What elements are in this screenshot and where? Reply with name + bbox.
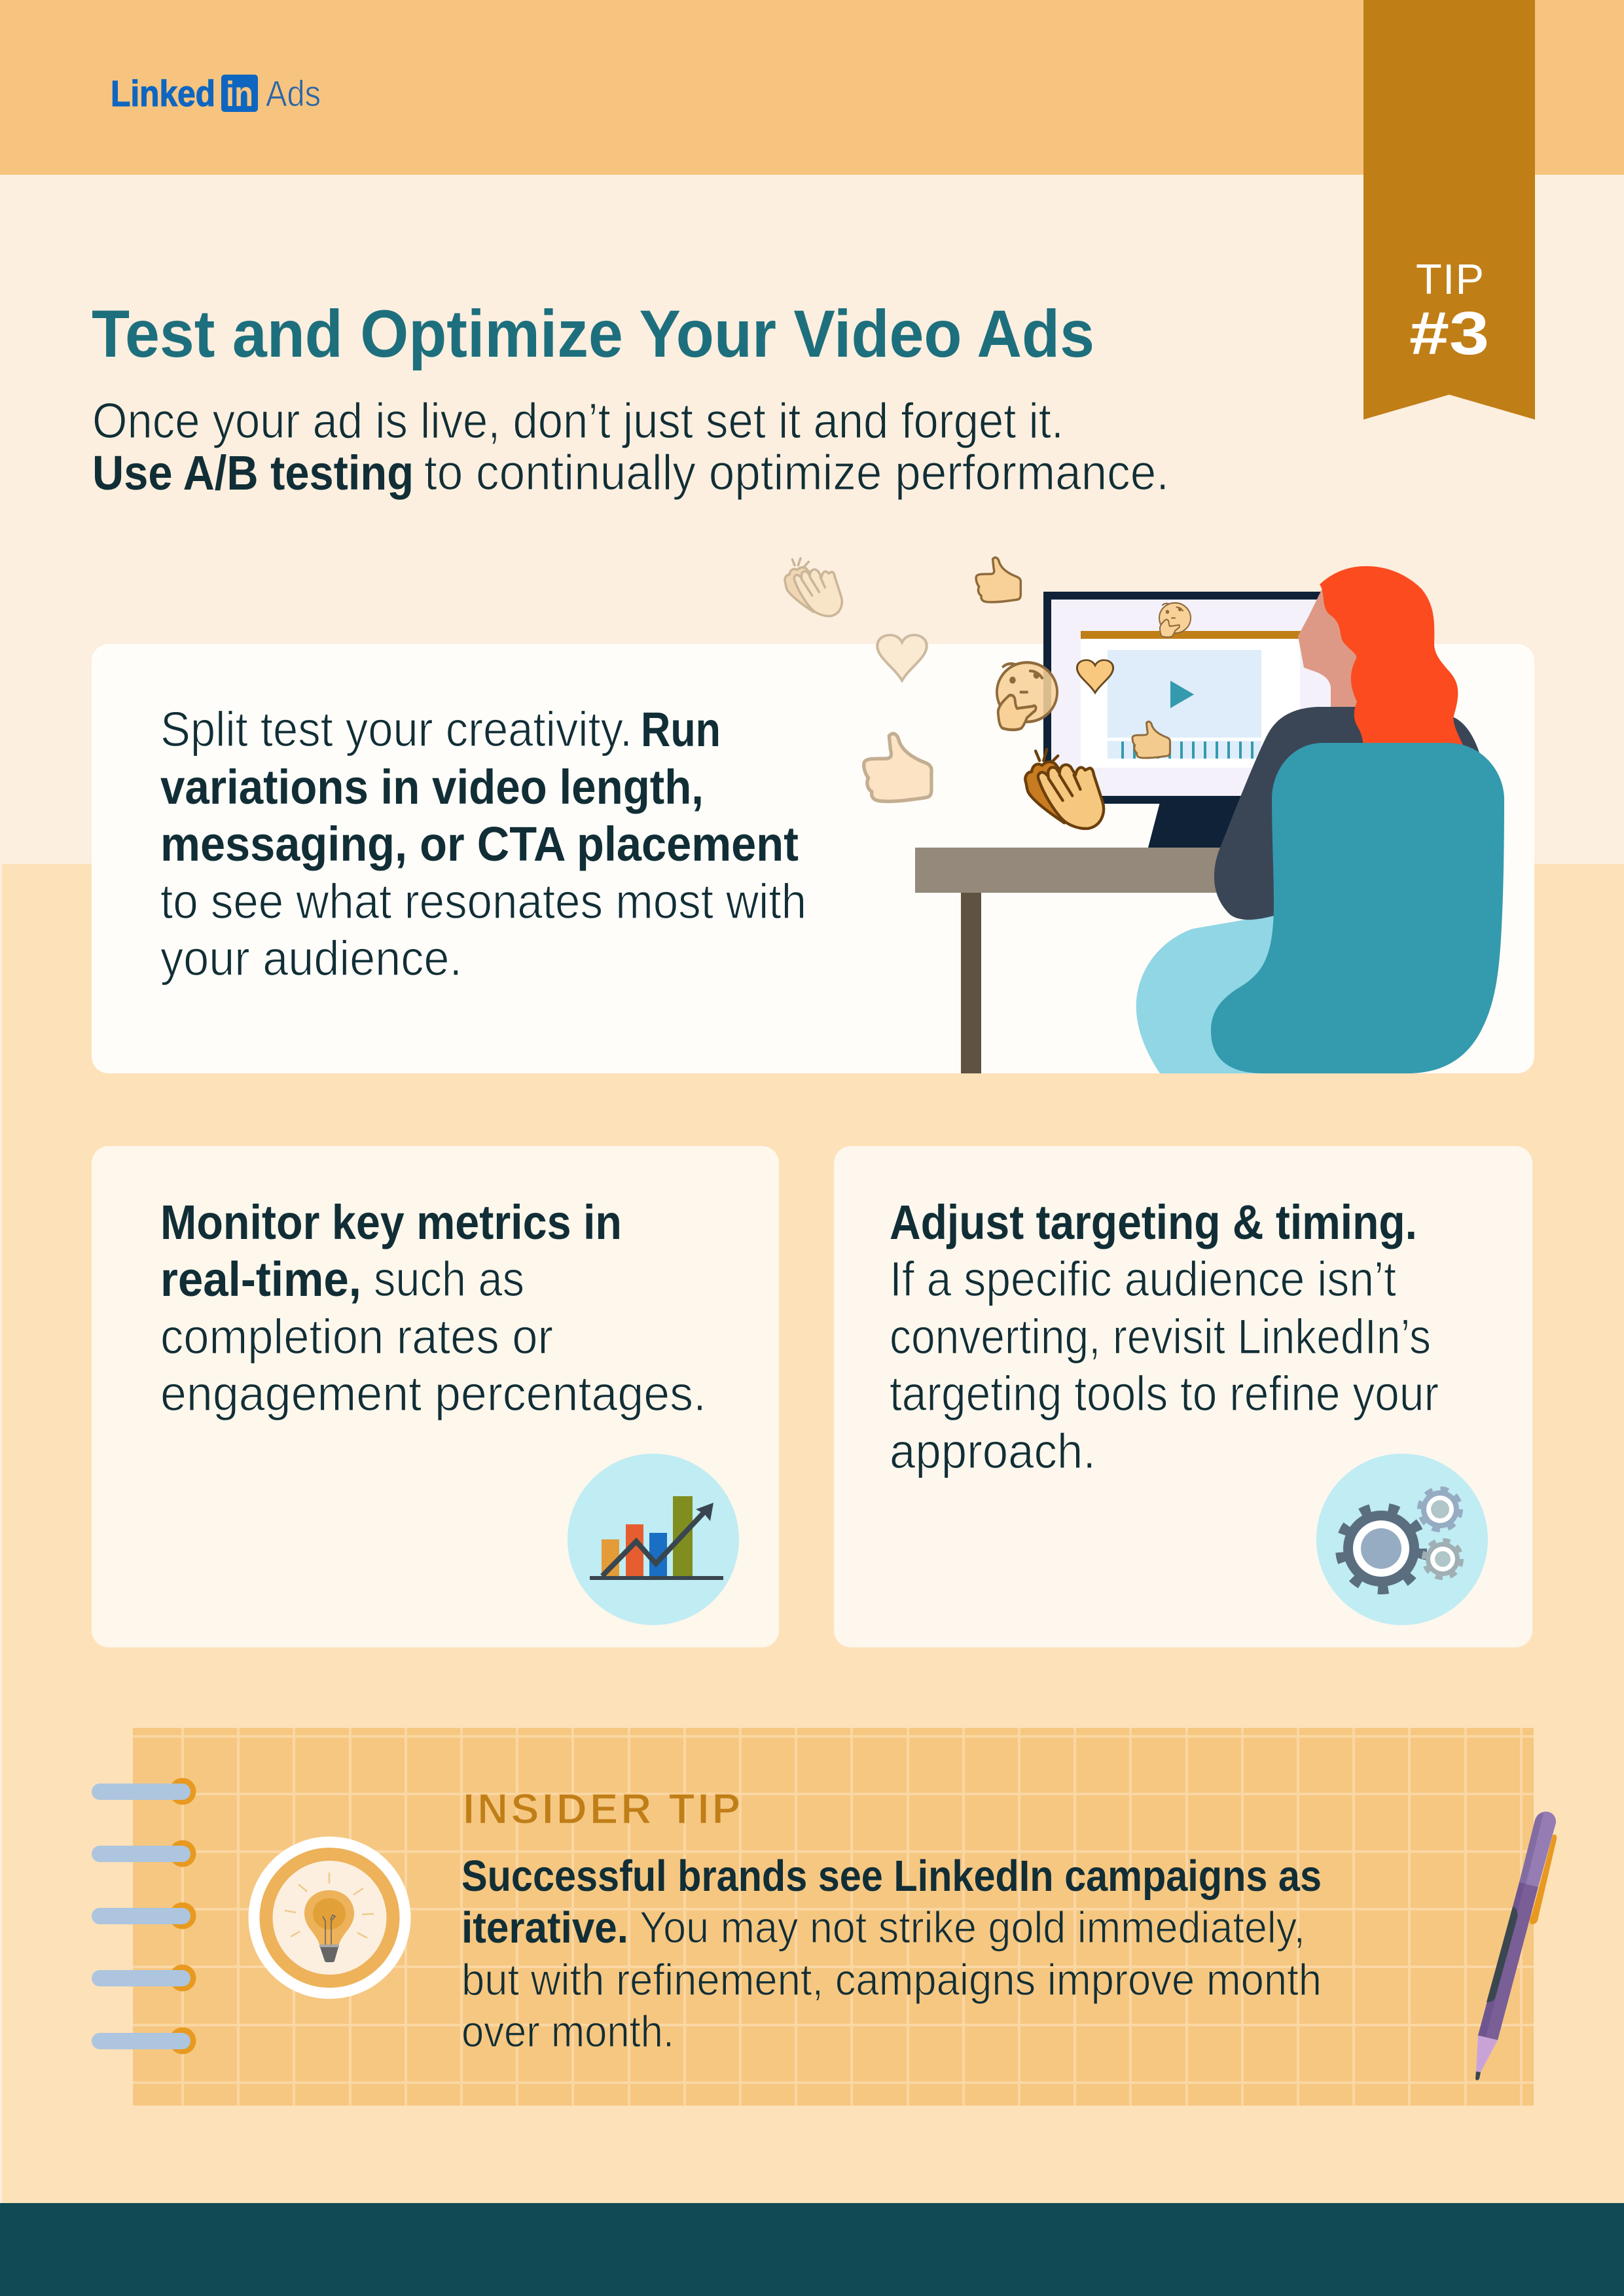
icon: faded heart [877,635,927,681]
logo: LinkedIn Ads: Linked [111,73,215,114]
subtitle [92,393,1169,501]
footer band [0,2203,1624,2296]
play button [1170,681,1194,708]
notebook spiral rings [92,1778,196,2054]
monitor [1043,592,1351,848]
woman: hair [1320,566,1466,753]
icon: thumbs up, top [976,558,1020,602]
text: adjust targeting: Adjust targeting & timing. [890,1195,1417,1249]
text: insider tip body: Successful brands see LinkedIn campaigns as [461,1852,1322,1901]
text: adjust targeting [890,1195,1439,1479]
woman: face [1298,588,1365,713]
text: insider tip body: over month. [461,2007,674,2056]
icon: clapping hands main [1025,749,1104,829]
header band [0,0,1624,175]
icon: thumbs up small on video [1132,722,1170,758]
text: monitor key metrics: Monitor key metrics in [160,1195,622,1249]
desk [915,848,1229,1073]
logo: LinkedIn Ads [111,73,321,114]
text: monitor key metrics [160,1195,706,1421]
ribbon: tip number: TIP [1416,255,1484,303]
text: adjust targeting: If a specific audience isn’t [890,1251,1396,1306]
title: Test and Optimize Your Video Ads [92,296,1094,371]
text: monitor key metrics: engagement percentages. [160,1366,706,1421]
logo: LinkedIn Ads: Ads [266,73,321,114]
ribbon: tip number: #3 [1409,299,1489,367]
text: split test: messaging, or CTA placement [160,817,799,871]
text: adjust targeting: approach. [890,1424,1096,1479]
icon: faded clapping hands [785,558,842,616]
text: split test: Run [641,702,721,757]
illustration: woman at desk with video monitor [915,566,1504,1073]
text: monitor key metrics: such as [374,1251,524,1306]
ribbon: tip number [1363,0,1535,420]
text: monitor key metrics: completion rates or [160,1309,553,1364]
text: split test [160,702,806,986]
woman: arm and shirt [1214,707,1479,920]
subtitle: to continually optimize performance. [424,445,1169,501]
progress ticks [1121,742,1254,759]
icon: faded thumbs up [864,734,931,801]
woman: legs [1136,914,1283,1073]
text: insider tip body: but with refinement, campaigns improve month [461,1955,1322,2005]
woman: chair back [1211,743,1504,1073]
heading: insider tip: INSIDER TIP [463,1785,740,1833]
icon: bar chart with arrow [568,1454,739,1625]
text: split test: variations in video length, [160,760,704,814]
panel: monitor key metrics [92,1146,779,1647]
text: insider tip body: You may not strike gold immediately, [640,1903,1305,1952]
panel: split test card [92,644,1534,1073]
icon: thinking face large [997,662,1057,730]
subtitle: Once your ad is live, don’t just set it and forget it. [92,393,1064,449]
text: split test: Split test your creativity. [160,702,632,757]
icon: light bulb [249,1837,411,1999]
text: split test: your audience. [160,931,462,986]
subtitle: Use A/B testing [92,446,414,500]
icon: gears [1316,1454,1488,1625]
text: split test: to see what resonates most with [160,874,806,929]
icon: pen [1475,1812,1557,2080]
text: adjust targeting: targeting tools to refine your [890,1366,1439,1421]
icon: thinking face small [1159,603,1191,637]
panel: insider tip notebook [92,1728,1557,2106]
text: insider tip body [461,1852,1322,2056]
notebook paper with grid [133,1728,1534,2106]
icon: heart on monitor [1077,660,1113,692]
text: monitor key metrics: real-time, [160,1252,361,1306]
text: adjust targeting: converting, revisit LinkedIn’s [890,1309,1431,1364]
logo: LinkedIn Ads: in [226,75,253,114]
text: insider tip body: iterative. [461,1903,628,1952]
panel: adjust targeting [834,1146,1532,1647]
